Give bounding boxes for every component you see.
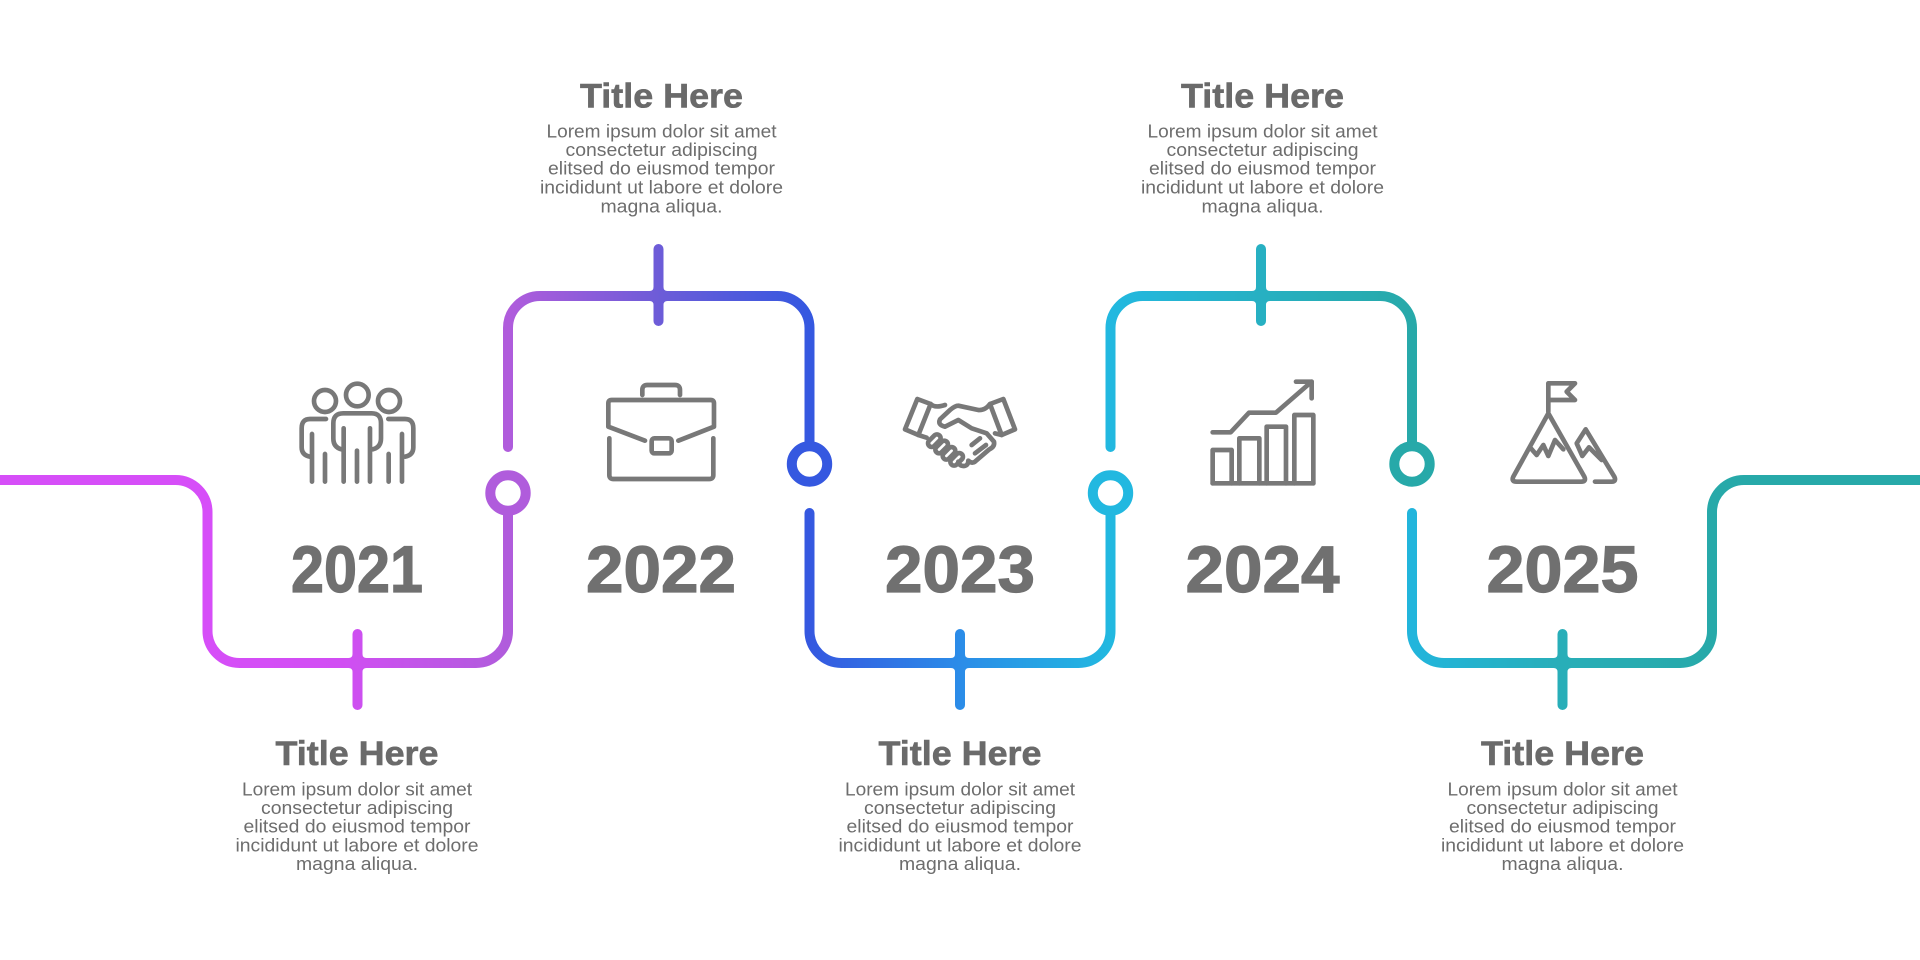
year 2023: 2023 [885, 532, 1035, 606]
year 2024: 2024 [1186, 532, 1340, 606]
title 2022: Title Here [580, 77, 743, 115]
body text 2025 [1441, 779, 1684, 874]
title 2023: Title Here [878, 735, 1042, 773]
body text 2021: Lorem ipsum dolor sit amet [242, 779, 472, 799]
step: 2024 [1141, 77, 1384, 606]
body text 2024 [1141, 121, 1384, 216]
year 2025: 2025 [1486, 532, 1638, 606]
title 2021: Title Here [276, 735, 438, 773]
timeline path [0, 249, 1920, 705]
step: 2025 [1441, 532, 1684, 874]
path segment: 2025 cyan to teal [1412, 480, 1920, 705]
body text 2021: incididunt ut labore et dolore [236, 835, 478, 855]
title 2024: Title Here [1181, 77, 1344, 115]
body text 2024: Lorem ipsum dolor sit amet [1148, 121, 1378, 141]
body text 2023: consectetur adipiscing [864, 798, 1056, 818]
step: 2022 [540, 77, 783, 606]
step: 2021 [236, 532, 478, 874]
body text 2025: magna aliqua. [1502, 854, 1624, 874]
body text 2025: consectetur adipiscing [1466, 798, 1658, 818]
body text 2023: elitsed do eiusmod tempor [846, 817, 1074, 837]
body text 2023 [838, 779, 1082, 874]
body text 2024: elitsed do eiusmod tempor [1149, 159, 1376, 179]
icon: handshake [905, 399, 1015, 467]
year 2021: 2021 [291, 532, 423, 606]
body text 2022 [540, 121, 783, 216]
body text 2023: magna aliqua. [899, 854, 1021, 874]
path segment: 2022 violet to blue [508, 249, 827, 482]
icon: mountain with flag [1513, 383, 1615, 482]
year 2022: 2022 [586, 532, 736, 606]
icon: briefcase [608, 385, 714, 479]
icon: growth chart [1213, 382, 1313, 483]
path segment: 2024 cyan to teal [1110, 249, 1430, 482]
body text 2025: Lorem ipsum dolor sit amet [1448, 779, 1678, 799]
body text 2023: incididunt ut labore et dolore [838, 835, 1082, 855]
body text 2021 [236, 779, 478, 874]
body text 2021: elitsed do eiusmod tempor [244, 817, 470, 837]
path segment: 2021 magenta [0, 475, 526, 705]
body text 2022: consectetur adipiscing [566, 140, 758, 160]
body text 2021: consectetur adipiscing [261, 798, 453, 818]
body text 2021: magna aliqua. [296, 854, 418, 874]
body text 2025: incididunt ut labore et dolore [1441, 835, 1684, 855]
title 2025: Title Here [1481, 735, 1644, 773]
body text 2024: consectetur adipiscing [1166, 140, 1358, 160]
body text 2024: magna aliqua. [1202, 196, 1324, 216]
icon: people [302, 384, 413, 482]
body text 2023: Lorem ipsum dolor sit amet [845, 779, 1075, 799]
body text 2024: incididunt ut labore et dolore [1141, 177, 1384, 197]
body text 2022: magna aliqua. [600, 196, 722, 216]
path segment: 2023 blue to cyan [810, 475, 1128, 705]
body text 2022: Lorem ipsum dolor sit amet [546, 121, 776, 141]
body text 2022: elitsed do eiusmod tempor [548, 159, 775, 179]
body text 2025: elitsed do eiusmod tempor [1449, 817, 1676, 837]
body text 2022: incididunt ut labore et dolore [540, 177, 783, 197]
step: 2023 [838, 532, 1082, 874]
